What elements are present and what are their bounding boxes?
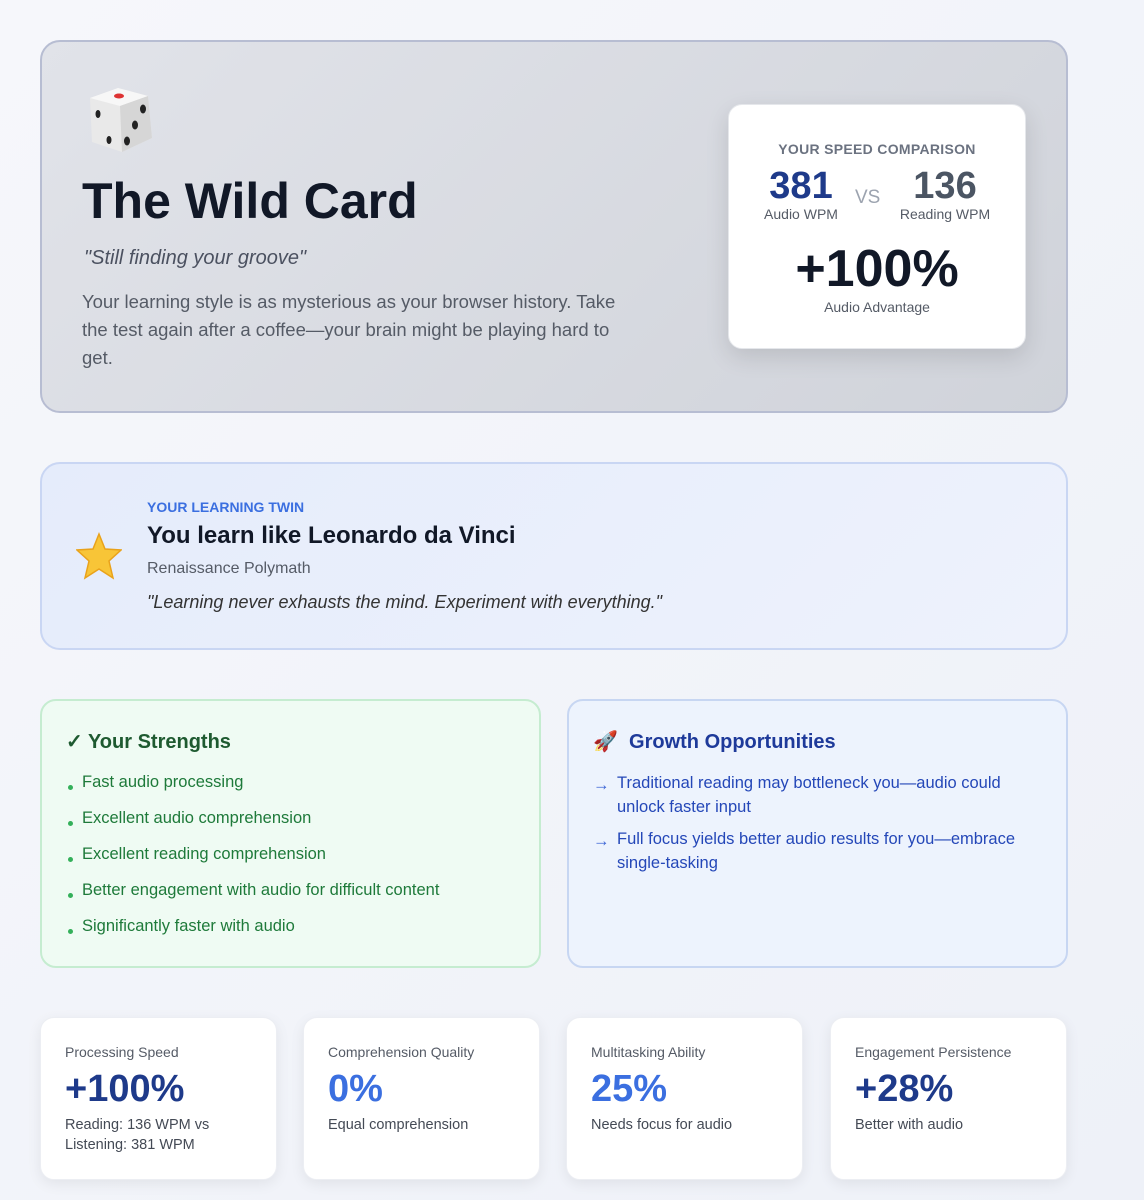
panel: speed comparison: VS bbox=[855, 187, 880, 208]
panel: strengths: Significantly faster with audio bbox=[82, 917, 295, 935]
panel: growth: Full focus yields better audio results for you—embrace single-tasking bbox=[617, 830, 1015, 872]
tagline: "Still finding your groove" bbox=[84, 247, 306, 269]
stat card: processing speed: +100% bbox=[65, 1068, 184, 1110]
panel: strengths bbox=[40, 699, 541, 968]
audio wpm: 381 bbox=[769, 165, 833, 207]
panel: speed comparison bbox=[728, 104, 1026, 349]
panel: speed comparison: YOUR SPEED COMPARISON bbox=[778, 141, 976, 157]
stat card: multitasking: Needs focus for audio bbox=[591, 1117, 732, 1133]
description: Your learning style is as mysterious as your browser history. Take bbox=[82, 291, 615, 312]
description bbox=[82, 291, 615, 368]
panel: hero bbox=[40, 40, 1068, 413]
panel: learning twin: Renaissance Polymath bbox=[147, 560, 311, 577]
panel: growth bbox=[567, 699, 1068, 968]
stat card: comprehension: Equal comprehension bbox=[328, 1117, 468, 1133]
stat card: multitasking: 25% bbox=[591, 1068, 667, 1110]
stat card: processing speed: Listening: 381 WPM bbox=[65, 1137, 195, 1153]
panel: learning twin bbox=[40, 462, 1068, 650]
stat card: processing speed: Reading: 136 WPM vs bbox=[65, 1117, 209, 1133]
description: get. bbox=[82, 347, 113, 368]
panel: learning twin: "Learning never exhausts the mind. Experiment with everything." bbox=[147, 592, 662, 612]
reading wpm: Reading WPM bbox=[900, 206, 990, 222]
stat card: comprehension: Comprehension Quality bbox=[328, 1044, 474, 1060]
description: the test again after a coffee—your brain might be playing hard to bbox=[82, 319, 609, 340]
audio advantage: Audio Advantage bbox=[824, 299, 930, 315]
panel: strengths: Excellent audio comprehension bbox=[82, 809, 311, 827]
icon: dice bbox=[90, 88, 152, 152]
stat card: multitasking bbox=[566, 1017, 803, 1180]
icon: star bbox=[76, 532, 122, 580]
stat card: engagement: Engagement Persistence bbox=[855, 1044, 1011, 1060]
stat card: processing speed bbox=[40, 1017, 277, 1180]
panel: strengths: Better engagement with audio for difficult content bbox=[82, 881, 439, 899]
audio wpm bbox=[764, 165, 838, 222]
stat card: engagement: Better with audio bbox=[855, 1117, 963, 1133]
stat card: comprehension: 0% bbox=[328, 1068, 383, 1110]
panel: learning twin: You learn like Leonardo da Vinci bbox=[147, 522, 516, 549]
stat card: engagement bbox=[830, 1017, 1067, 1180]
title: The Wild Card bbox=[82, 173, 418, 229]
panel: growth: Traditional reading may bottleneck you—audio could unlock faster input bbox=[617, 774, 1001, 816]
stat card: engagement: +28% bbox=[855, 1068, 953, 1110]
panel: strengths: ✓ Your Strengths bbox=[66, 731, 231, 753]
panel: strengths: Excellent reading comprehension bbox=[82, 845, 326, 863]
panel: growth: 🚀 Growth Opportunities bbox=[593, 731, 836, 753]
reading wpm bbox=[900, 165, 990, 222]
stat card: processing speed: Processing Speed bbox=[65, 1044, 179, 1060]
audio wpm: Audio WPM bbox=[764, 206, 838, 222]
stat card: multitasking: Multitasking Ability bbox=[591, 1044, 705, 1060]
stat card: comprehension bbox=[303, 1017, 540, 1180]
audio advantage: +100% bbox=[795, 240, 959, 298]
reading wpm: 136 bbox=[913, 165, 977, 207]
panel: learning twin: YOUR LEARNING TWIN bbox=[147, 499, 304, 515]
panel: strengths: Fast audio processing bbox=[82, 773, 243, 791]
